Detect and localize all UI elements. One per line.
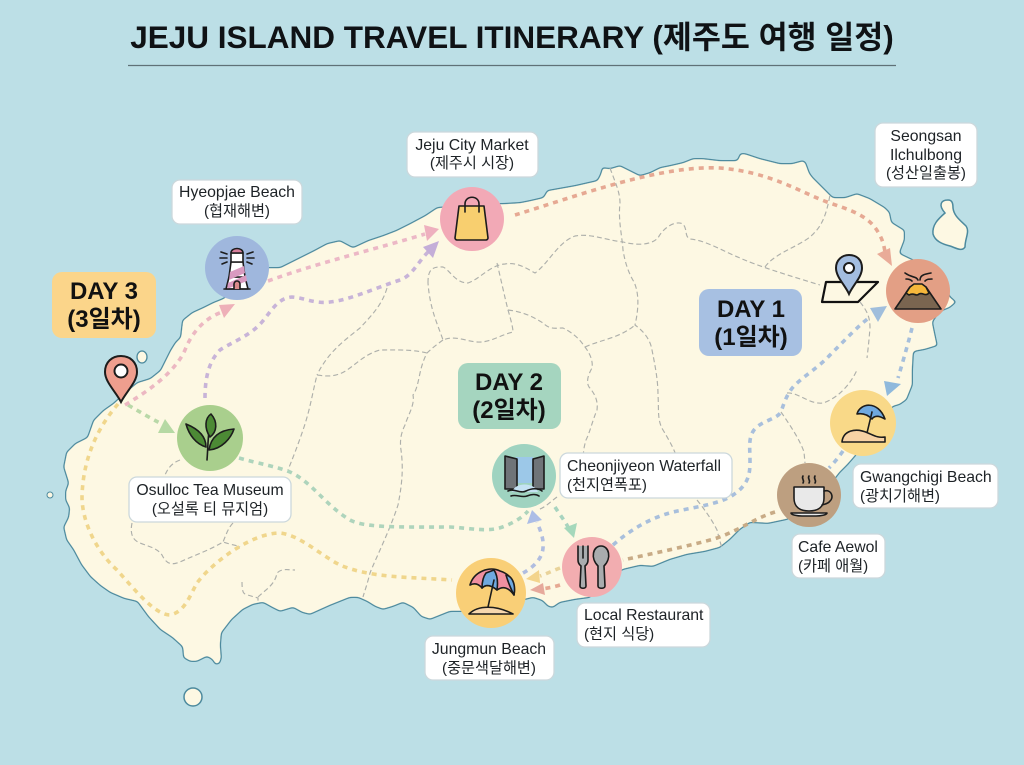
icon: market shopping bag	[440, 187, 504, 251]
map: Jeju island coastline	[63, 153, 957, 665]
label: Osulloc Tea Museum	[129, 477, 291, 522]
label: Cafe Aewol: (카페 애월)	[798, 558, 868, 575]
route: Jungmun to waterfall (periwinkle)	[523, 510, 543, 573]
icon: Jungmun beach umbrella	[456, 558, 526, 628]
islets	[47, 200, 968, 706]
label: Jeju City Market	[407, 132, 538, 177]
route: Cafe to Jungmun (brown)	[526, 512, 775, 583]
icon: Seongsan volcano	[886, 259, 950, 323]
route: restaurant to Jungmun (salmon)	[530, 583, 560, 595]
label: Gwangchigi Beach: (광치기해변)	[860, 488, 940, 505]
label: Local Restaurant: (현지 식당)	[584, 626, 654, 643]
label: Seongsan Ilchulbong	[875, 123, 977, 187]
label: Hyeopjae Beach: Hyeopjae Beach	[179, 184, 295, 201]
title: JEJU ISLAND TRAVEL ITINERARY (제주도 여행 일정)	[130, 19, 894, 55]
label: Jungmun Beach: (중문색달해변)	[442, 660, 536, 677]
badge: day 2: DAY 2	[475, 369, 543, 396]
label: Cafe Aewol	[792, 534, 885, 578]
label: Gwangchigi Beach: Gwangchigi Beach	[860, 469, 992, 486]
route: pin to tea museum (green arrow)	[128, 405, 175, 433]
label: Osulloc Tea Museum: (오설록 티 뮤지엄)	[152, 501, 268, 518]
icon: Gwangchigi beach umbrella	[830, 390, 896, 456]
label: Cafe Aewol: Cafe Aewol	[798, 539, 878, 556]
route: pin to Jungmun (yellow)	[82, 404, 452, 615]
label: Seongsan Ilchulbong: (성산일출봉)	[886, 165, 966, 182]
district boundaries	[131, 168, 870, 603]
route: Hyeopjae to market (pink)	[268, 225, 439, 281]
label: Jeju City Market: Jeju City Market	[415, 137, 529, 154]
icon: day 3 location pin	[105, 356, 137, 402]
icon: Cafe coffee cup	[777, 463, 841, 527]
label: Hyeopjae Beach	[172, 180, 302, 224]
route: Gwangchigi to Cafe	[829, 451, 843, 468]
label: Cheonjiyeon Waterfall	[560, 453, 732, 498]
label: Gwangchigi Beach	[853, 464, 998, 508]
route: Seongsan to Gwangchigi	[884, 328, 912, 396]
label: Jungmun Beach	[425, 636, 554, 680]
route: tea museum to waterfall (green)	[239, 458, 528, 530]
badge: day 1: DAY 1	[717, 296, 785, 323]
label: Local Restaurant: Local Restaurant	[584, 607, 704, 624]
badge: day 3: DAY 3	[70, 278, 138, 305]
badge: day 1	[699, 289, 802, 356]
route: pin to Hyeopjae (pink)	[125, 304, 235, 405]
icon: restaurant fork and spoon	[562, 537, 622, 597]
label: Cheonjiyeon Waterfall: (천지연폭포)	[567, 477, 647, 494]
icon: day 1 map pin	[822, 255, 878, 302]
label: Cheonjiyeon Waterfall: Cheonjiyeon Waterfall	[567, 458, 721, 475]
badge: day 2: (2일차)	[472, 397, 546, 424]
label: Jungmun Beach: Jungmun Beach	[432, 641, 546, 658]
icon: Cheonjiyeon waterfall	[492, 444, 556, 508]
icon: Osulloc tea leaves	[177, 405, 243, 471]
label: Local Restaurant	[577, 603, 710, 647]
badge: day 1: (1일차)	[714, 324, 788, 351]
badge: day 3	[52, 272, 156, 338]
badge: day 2	[458, 363, 561, 429]
label: Hyeopjae Beach: (협재해변)	[204, 203, 270, 220]
badge: day 3: (3일차)	[67, 306, 141, 333]
label: Osulloc Tea Museum: Osulloc Tea Museum	[136, 482, 284, 499]
route: restaurant to Seongsan (blue)	[613, 306, 887, 545]
icon: Hyeopjae lighthouse	[205, 236, 269, 300]
label: Jeju City Market: (제주시 시장)	[430, 155, 514, 172]
route: waterfall to restaurant (mint)	[555, 507, 577, 538]
route: tea museum to Jeju market (purple)	[205, 241, 439, 398]
label: Seongsan Ilchulbong: Ilchulbong	[890, 147, 962, 164]
label: Seongsan Ilchulbong: Seongsan	[890, 128, 962, 145]
route: Jeju market to Seongsan (day 1)	[515, 168, 892, 266]
